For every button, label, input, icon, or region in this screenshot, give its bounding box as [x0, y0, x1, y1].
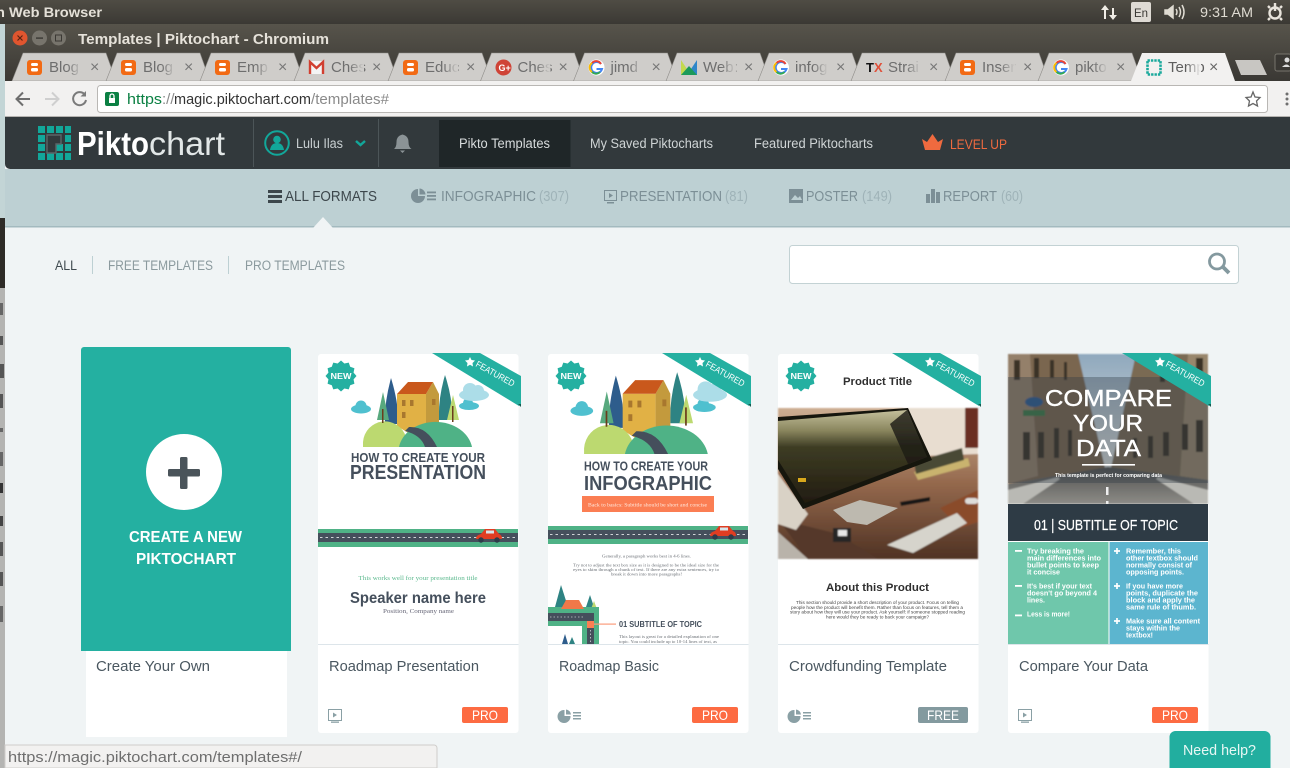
- power icon: [1268, 3, 1282, 20]
- pricing filters: PRO TEMPLATES: [245, 258, 345, 273]
- thumbnail illustration: [318, 375, 518, 615]
- tab: Blogger Educ: [388, 53, 492, 81]
- tab: Blogger 1: ×: [90, 59, 99, 76]
- format: infographic: (307): [539, 189, 569, 205]
- format: report: (60): [1001, 189, 1023, 205]
- blue column: normally consist of: [1126, 560, 1192, 570]
- bookmark star: [1246, 92, 1260, 106]
- pricing filters: [55, 256, 345, 274]
- nav item: saved: My Saved Piktocharts: [590, 136, 713, 151]
- blue column: opposing points.: [1126, 568, 1184, 576]
- intro paragraph: Try not to adjust the text box size as it is designed to be the ideal size for the: [573, 562, 719, 568]
- tab: Blogger 2: ×: [184, 59, 193, 76]
- tab: Google Plus: ×: [558, 59, 568, 76]
- tab: Blogger Inser: ×: [1023, 59, 1032, 76]
- blue column: [1110, 542, 1208, 644]
- close button: [12, 30, 28, 46]
- presentation title: PRESENTATION: [350, 462, 486, 484]
- hills and house scene: [351, 375, 489, 447]
- need help button: [1170, 731, 1270, 768]
- about paragraph: This section should provide a short description of your product. Focus on telling: [796, 600, 960, 605]
- piktochart logo: [38, 125, 225, 162]
- format: poster: POSTER: [806, 189, 858, 205]
- presentation text: [350, 575, 486, 615]
- featured ribbon: [892, 353, 981, 407]
- template name: Roadmap Basic: [559, 658, 659, 675]
- presentation title: [350, 450, 486, 484]
- green column: [1008, 542, 1108, 644]
- blue column: points, duplicate the: [1126, 588, 1198, 598]
- featured ribbon: FEATURED: [934, 359, 977, 389]
- card: crowdfunding template: [778, 353, 981, 733]
- pricing filters: ALL: [55, 258, 77, 273]
- tab: Blogger Educ: Educ: [425, 59, 460, 76]
- clock: 9:31 AM: [1200, 4, 1253, 20]
- create label: PIKTOCHART: [136, 551, 237, 568]
- back arrow: [16, 92, 30, 106]
- format: poster: (149): [862, 189, 892, 205]
- about paragraph: here would they be ready to back your campaign?: [826, 614, 930, 620]
- level up: LEVEL UP: [950, 136, 1007, 152]
- format: infographic: INFOGRAPHIC: [441, 189, 536, 205]
- tab: Google pikto: [1038, 53, 1142, 81]
- tab: TeX Strai: X: [874, 60, 883, 75]
- card: compare your data: [1008, 353, 1211, 733]
- tab: Blogger Emp: ×: [278, 59, 287, 76]
- product photo: [778, 408, 978, 559]
- need help button: Need help?: [1183, 742, 1256, 759]
- url text: ://: [162, 91, 175, 108]
- tab: Web: ×: [744, 59, 753, 76]
- section text: This layout is great for a detailed explanation of one: [619, 634, 719, 639]
- infographic title: HOW TO CREATE YOUR: [584, 460, 708, 474]
- intro paragraph: break it down into more paragraphs!: [611, 572, 682, 576]
- volume icon: [1165, 5, 1184, 19]
- tab: TeX Strai: T: [866, 60, 874, 75]
- reload icon: [73, 91, 86, 105]
- active nav tab: Pikto Templates: [459, 136, 550, 151]
- window title: Templates | Piktochart - Chromium: [78, 32, 329, 48]
- tab: Google jimdo: [574, 53, 678, 81]
- blue column: block and apply the: [1126, 596, 1195, 604]
- active tab: Templates: Temp: [1168, 59, 1205, 76]
- chevron: [356, 141, 365, 145]
- new badge: NEW: [790, 372, 812, 381]
- tab: Google pikto: ×: [1116, 59, 1125, 76]
- tab: Google jimdo: jimd: [610, 59, 638, 76]
- crown icon: [922, 134, 943, 150]
- new badge: [556, 360, 586, 392]
- active tab: Templates: [1131, 53, 1235, 81]
- template name: Crowdfunding Template: [789, 658, 947, 675]
- tab: TeX Strai: ×: [929, 59, 938, 76]
- tab: Google Plus: G+: [498, 63, 511, 73]
- logo wordmark: Pikto: [77, 125, 149, 162]
- featured ribbon: FEATURED: [474, 359, 517, 389]
- mini roadmap illustration: [548, 585, 616, 644]
- search icon: [1210, 254, 1229, 273]
- tab: Blogger Emp: Emp: [237, 59, 268, 76]
- tab: TeX Strai: Strai: [888, 59, 919, 76]
- left desktop strip: [0, 24, 5, 768]
- featured ribbon: [432, 353, 521, 407]
- tab: Google Plus: [480, 53, 584, 81]
- thumbnail illustration: [548, 372, 748, 645]
- about heading: About this Product: [826, 582, 929, 594]
- green column: Less is more!: [1027, 610, 1070, 618]
- subtitle band: [1008, 504, 1208, 541]
- language indicator: [1131, 2, 1151, 22]
- browser tabs: [12, 53, 1290, 81]
- card: roadmap basic: [548, 353, 751, 733]
- green column: bullet points to keep: [1027, 560, 1099, 570]
- intro paragraph: eyes to skim through a chunk of text. If there are any extra sentences, try to: [573, 567, 720, 573]
- active tab: Templates: ×: [1209, 59, 1218, 76]
- lock icon: [105, 92, 119, 106]
- pro badge: PRO: [1162, 707, 1188, 723]
- card: create your own: [81, 347, 291, 737]
- format: infographic: [411, 188, 569, 205]
- tab: Google pikto: pikto: [1075, 59, 1107, 76]
- monitor: [778, 408, 932, 525]
- desktop top panel: [0, 0, 1290, 24]
- new badge: NEW: [560, 372, 582, 381]
- about paragraph: [790, 600, 966, 620]
- tab: Blogger 2: [106, 53, 210, 81]
- pro badge: [462, 707, 508, 723]
- url text: https: [127, 91, 162, 108]
- tab: Blogger Inser: [945, 53, 1049, 81]
- subtitle band: 01 | SUBTITLE OF TOPIC: [1034, 518, 1178, 534]
- format: poster: [789, 189, 892, 205]
- logo wordmark: chart: [149, 125, 225, 162]
- format: all: ALL FORMATS: [285, 189, 377, 205]
- subtitle banner: Back to basics: Subtitle should be short and concise: [588, 502, 708, 508]
- tab: TeX Strai: [851, 53, 955, 81]
- compare headline: YOUR: [1073, 410, 1143, 436]
- road band: [318, 529, 518, 547]
- browser toolbar: [5, 81, 1290, 117]
- product title: Product Title: [843, 376, 912, 388]
- infographic format icon: [788, 710, 811, 723]
- intro paragraph: [573, 554, 720, 576]
- address bar: [98, 86, 1268, 112]
- green column: It's best if your text: [1027, 582, 1092, 590]
- presentation format icon: [1018, 710, 1032, 723]
- compare subtitle: This template is perfect for comparing data: [1055, 473, 1163, 479]
- template name: Roadmap Presentation: [329, 658, 479, 675]
- logo mark: [38, 126, 71, 160]
- browser title bar: [5, 24, 1290, 81]
- tab: Google Plus: Ches: [518, 59, 553, 76]
- featured ribbon: FEATURED: [1164, 359, 1207, 389]
- blue column: stays within the: [1126, 624, 1180, 632]
- pro badge: [1152, 707, 1198, 723]
- infographic format icon: [558, 710, 581, 723]
- presentation text: This works well for your presentation title: [358, 575, 478, 582]
- card: roadmap presentation: [318, 353, 521, 733]
- blue column: Remember, this: [1126, 546, 1181, 556]
- card name: Create Your Own: [96, 658, 210, 675]
- new tab button: [1235, 60, 1267, 75]
- new badge: [326, 360, 356, 392]
- blue column: textbox!: [1126, 630, 1153, 640]
- profile button: [1275, 54, 1290, 71]
- intro paragraph: Generally, a paragraph works best in 4-6 lines.: [602, 554, 691, 560]
- red car: [476, 529, 502, 543]
- section text: topic. You could include up to 10-14 lines of text, as: [619, 639, 717, 645]
- tab: Google infog: [758, 53, 862, 81]
- blue column: other textbox should: [1126, 554, 1198, 562]
- format: report: REPORT: [943, 189, 997, 205]
- blue column: If you have more: [1126, 582, 1183, 590]
- plus circle: [146, 434, 222, 510]
- featured ribbon: FEATURED: [704, 359, 747, 389]
- pricing filters: FREE TEMPLATES: [108, 258, 213, 273]
- about paragraph: story about how they will use your product. Ask yourself: if someone stopped reading: [790, 610, 966, 614]
- search box: [790, 246, 1238, 284]
- tab: Gmail: [294, 53, 398, 81]
- url text: /templates#: [311, 91, 390, 108]
- featured ribbon: [1122, 353, 1211, 407]
- hills and house scene: [570, 372, 727, 454]
- create label: CREATE A NEW: [129, 529, 242, 546]
- tab: Gmail: ×: [372, 59, 381, 76]
- tab: Web: Web:: [703, 59, 738, 76]
- pro badge: [692, 707, 738, 723]
- compare headline: [1045, 385, 1172, 461]
- tab: Blogger 1: [12, 53, 116, 81]
- green column: doesn't go beyond 4: [1027, 588, 1098, 598]
- pro badge: PRO: [702, 707, 728, 723]
- green column: main differences into: [1027, 554, 1101, 562]
- network arrows icon: [1101, 5, 1117, 20]
- presentation text: Speaker name here: [350, 590, 486, 607]
- green column: Try breaking the: [1027, 546, 1084, 556]
- tab: Google jimdo: ×: [652, 59, 661, 76]
- tab: Google infog: infog: [795, 59, 828, 76]
- nav item: featured: Featured Piktocharts: [754, 136, 873, 151]
- blue column: same rule of thumb.: [1126, 602, 1196, 612]
- compare headline: DATA: [1076, 435, 1142, 461]
- tab: Blogger Inser: Inser: [982, 59, 1015, 76]
- tab: Blogger 2: Blog: [143, 59, 173, 76]
- minimize button: [32, 30, 47, 46]
- road band: [548, 526, 748, 544]
- navigation bar: [5, 117, 1290, 169]
- tab: Blogger Educ: ×: [466, 59, 475, 76]
- presentation title: HOW TO CREATE YOUR: [351, 450, 486, 465]
- green column: it concise: [1027, 568, 1060, 576]
- user name: Lulu Ilas: [296, 136, 343, 151]
- new badge: NEW: [330, 372, 352, 381]
- active nav tab: [439, 120, 570, 167]
- infographic title: [584, 460, 712, 495]
- presentation text: Position, Company name: [383, 609, 454, 615]
- street photo: [1008, 354, 1208, 504]
- blue column: Make sure all content: [1126, 616, 1200, 626]
- maximize button: [51, 30, 66, 46]
- free badge: FREE: [927, 707, 959, 723]
- compare headline: COMPARE: [1045, 385, 1172, 411]
- template name: Compare Your Data: [1019, 658, 1149, 675]
- section subtitle: 01 SUBTITLE OF TOPIC: [619, 620, 702, 629]
- new badge: [786, 360, 816, 392]
- format: presentation: PRESENTATION: [620, 189, 722, 205]
- green column: lines.: [1027, 596, 1045, 604]
- browser status bubble: https://magic.piktochart.com/templates#/: [8, 749, 303, 766]
- tab: Gmail: Ches: [331, 59, 366, 76]
- format: presentation: (81): [725, 189, 748, 205]
- infographic title: INFOGRAPHIC: [584, 472, 712, 495]
- subtitle banner: [582, 496, 714, 512]
- tab: Blogger Emp: [200, 53, 304, 81]
- url text: magic.piktochart.com: [174, 91, 311, 108]
- browser status bubble: [5, 745, 437, 768]
- about paragraph: people how the product will benefit them. Rather than focus on features, tell them a: [791, 605, 964, 610]
- tab: Blogger 1: Blog: [49, 59, 79, 76]
- tab: Web: [666, 53, 770, 81]
- language indicator: En: [1134, 6, 1148, 20]
- section text: [619, 634, 719, 645]
- notification bell: [394, 134, 412, 153]
- forward arrow: [45, 92, 58, 106]
- format filter bar: [5, 169, 1290, 228]
- featured ribbon: [662, 353, 751, 407]
- menu dots: [1286, 92, 1288, 106]
- pro badge: PRO: [472, 707, 498, 723]
- user avatar: [265, 131, 289, 155]
- tab: Google infog: ×: [836, 59, 845, 76]
- presentation format icon: [328, 710, 342, 723]
- red car: [710, 526, 736, 540]
- format: report: [926, 189, 1023, 205]
